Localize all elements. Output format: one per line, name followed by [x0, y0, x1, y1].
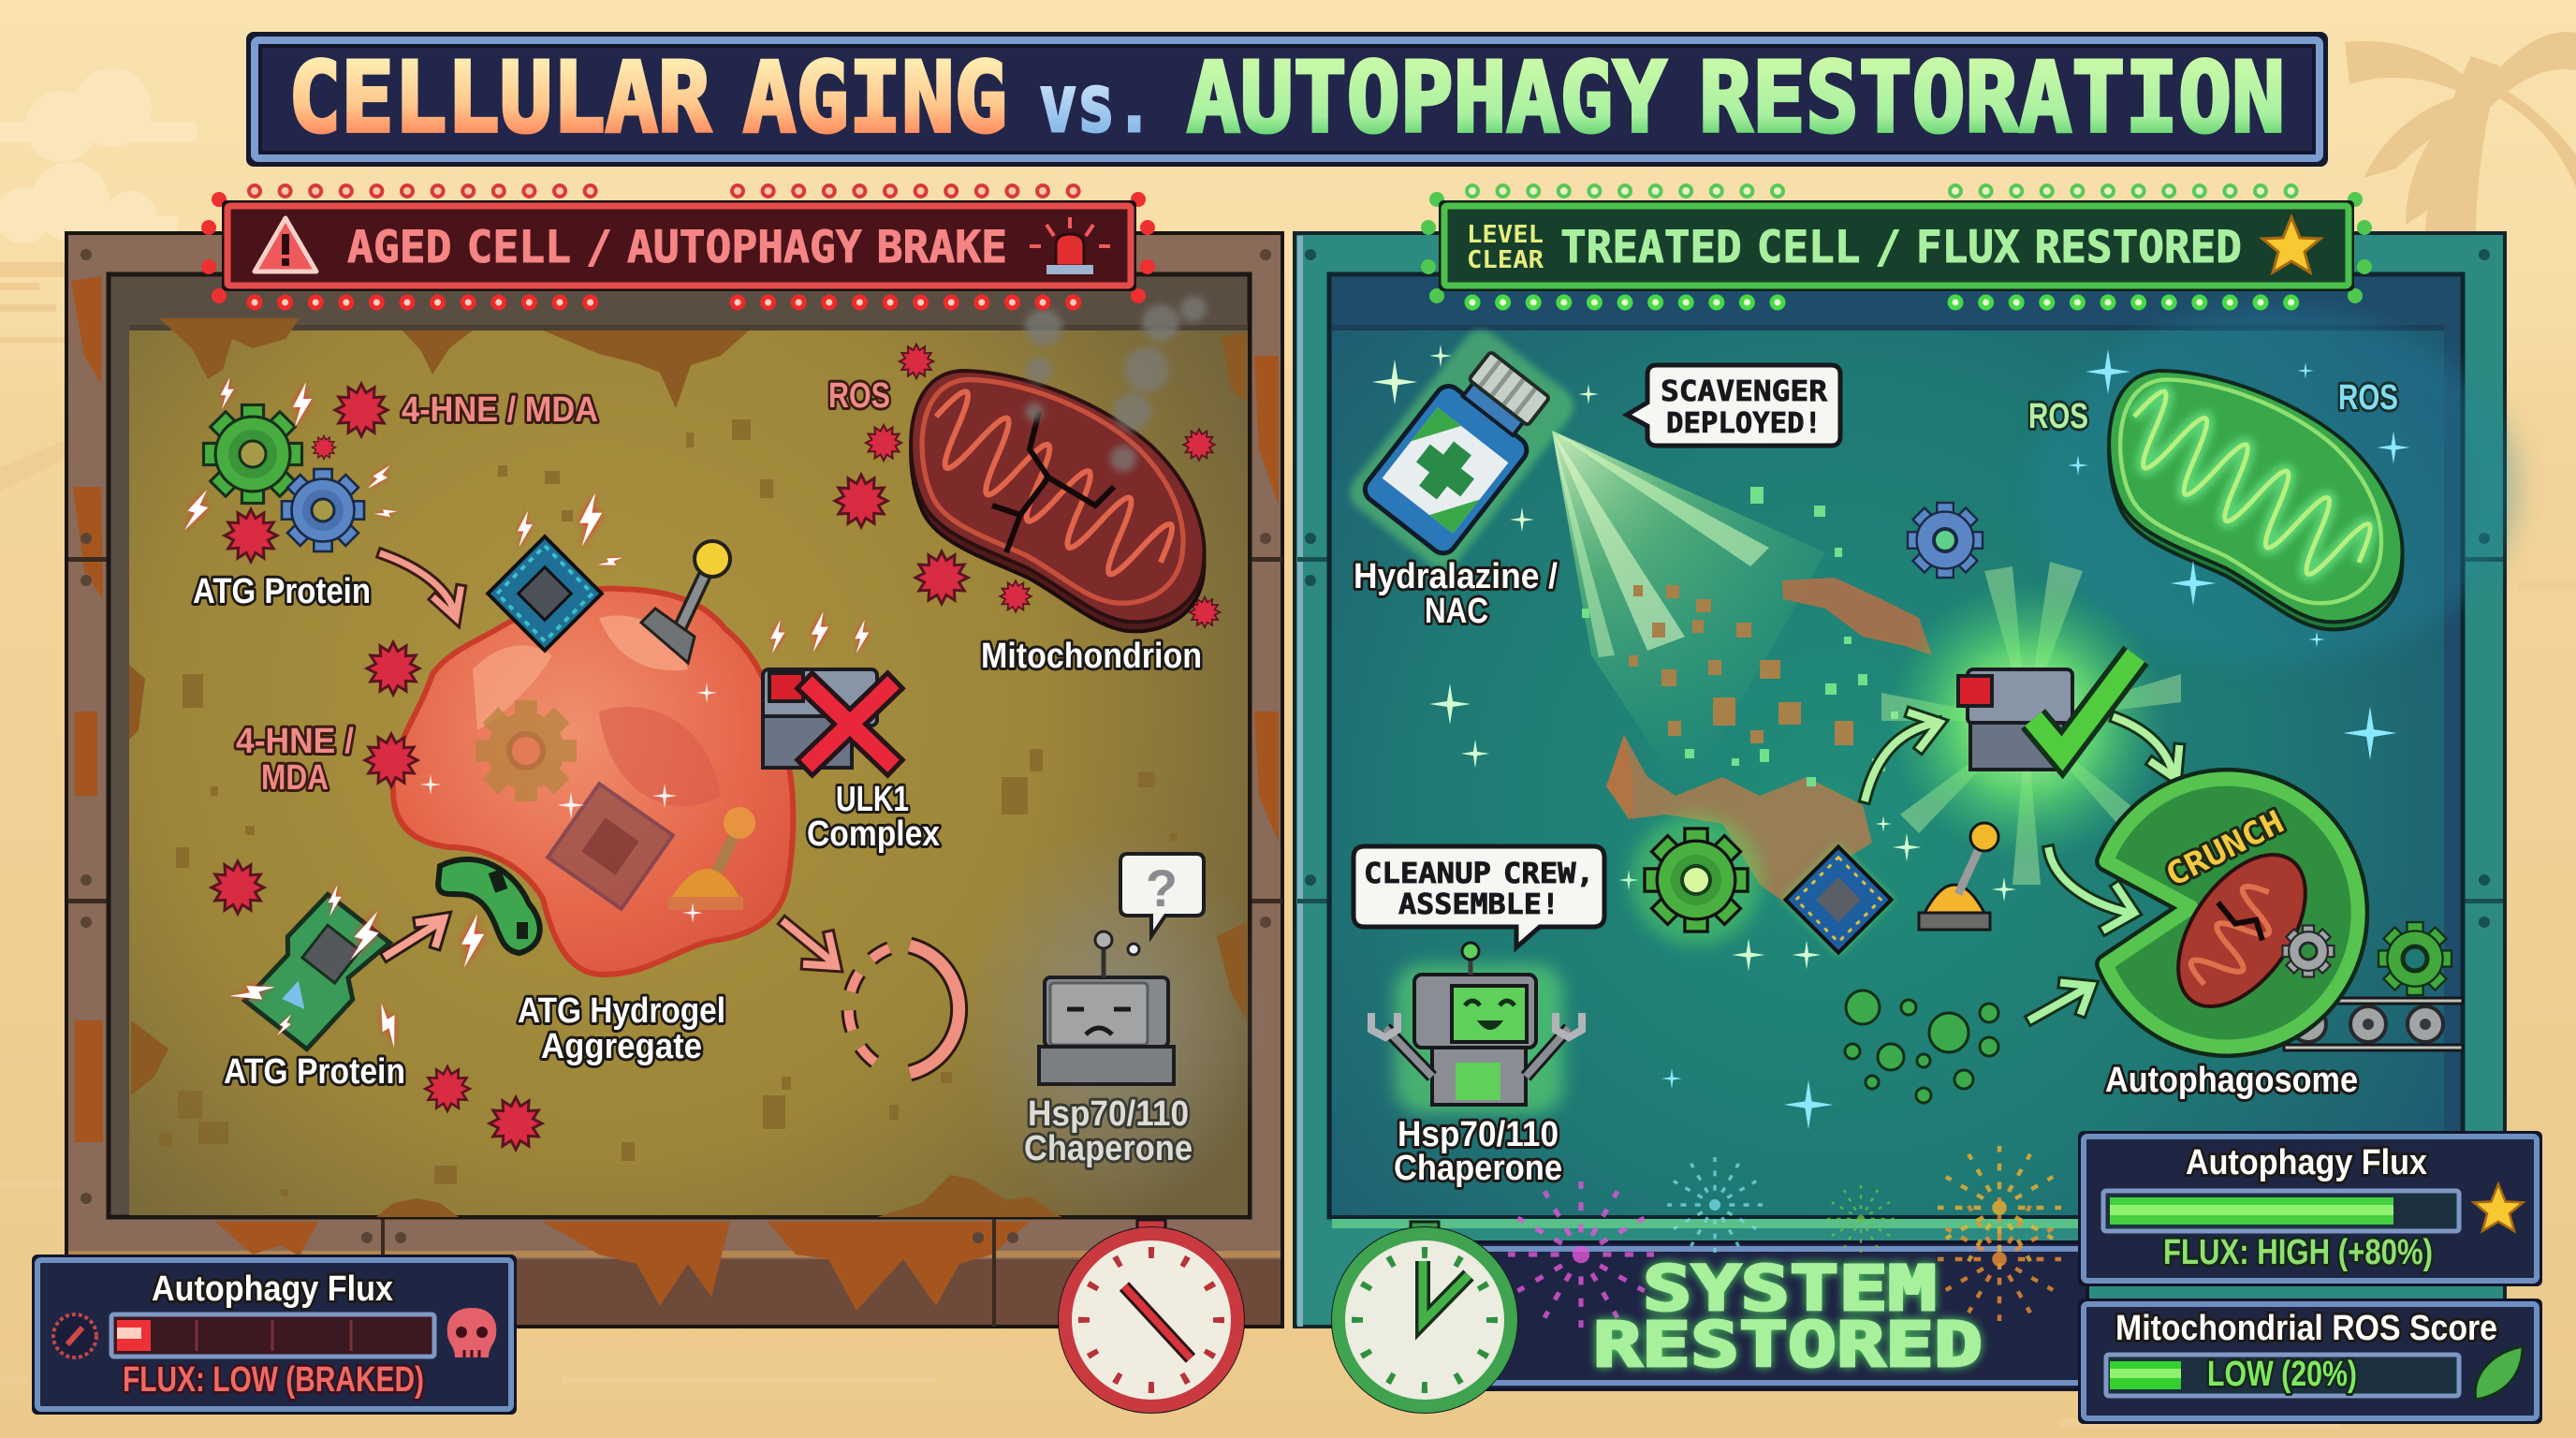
teal metal frame: [1295, 233, 2505, 1327]
arrow: fragments into autophagosome: [2032, 983, 2091, 1019]
ROS value: LOW (20%): [2207, 1355, 2357, 1394]
icon: smoke plumes: [1025, 296, 1207, 472]
icon: warning triangle: [255, 218, 316, 271]
header: treated cell banner: [1421, 191, 2372, 303]
flux bar high: [2103, 1191, 2459, 1231]
label: ROS right: ROS: [2338, 378, 2398, 418]
red stopped clock: [1060, 1220, 1243, 1412]
panel: aged cell: [66, 191, 1282, 1327]
HUD: treated autophagy flux: [2078, 1131, 2542, 1286]
label: Hsp70/110 Chaperone: [1024, 1094, 1193, 1168]
label: ATG Protein lower: ATG Protein: [224, 1052, 405, 1092]
icon: ULK1 machine restored: [1881, 562, 2181, 885]
green running clock: [1333, 1222, 1516, 1412]
HUD: aged autophagy flux: [32, 1255, 517, 1415]
hud title: Mitochondrial ROS Score: [2115, 1309, 2497, 1348]
speech bubble: scavenger deployed: DEPLOYED!: [1666, 407, 1822, 440]
level clear tag: CLEAR: [1467, 246, 1544, 274]
hud title: Autophagy Flux: [152, 1269, 393, 1309]
icon: happy chaperone robot: [1371, 943, 1582, 1114]
label: ROS left: ROS: [2028, 397, 2088, 436]
system restored text: SYSTEM: [1643, 1253, 1937, 1325]
label: ULK1 Complex: Complex: [807, 814, 940, 854]
small grey gear: [2282, 925, 2334, 977]
icon: green and blue ATG gears: [204, 404, 364, 551]
system restored text: [1593, 1253, 1983, 1381]
speech bubble: cleanup crew: [1354, 846, 1604, 947]
icon: gauge: [53, 1314, 96, 1357]
icon: failed autophagosome ring: [849, 946, 959, 1073]
label: Hydralazine / NAC: [1354, 557, 1558, 631]
marquee lights: [1472, 191, 2321, 302]
icon: green fragments: [1845, 990, 1998, 1103]
hud title: Autophagy Flux: [2186, 1143, 2427, 1182]
rusted metal frame: [66, 233, 1282, 1327]
header: aged cell banner: [201, 191, 1155, 303]
icon: gear on conveyor: [2378, 922, 2452, 995]
speech bubble: scavenger deployed: SCAVENGER: [1661, 375, 1828, 408]
icon: ROS and 4-HNE particles: [212, 345, 1220, 1150]
level clear tag: LEVEL: [1467, 221, 1544, 249]
flux bar low: [111, 1314, 434, 1357]
icon: sparks above ULK1: [770, 611, 869, 653]
green protein fragment: [438, 859, 540, 953]
speech bubble: cleanup crew: ASSEMBLE!: [1398, 888, 1559, 921]
level clear tag: [1467, 221, 1544, 274]
icon: sparks around broken chip: [228, 885, 484, 1049]
inner chamber floor: [109, 274, 1273, 1217]
flux status: FLUX: HIGH (+80%): [2163, 1233, 2433, 1272]
label: ATG Hydrogel Aggregate: ATG Hydrogel: [518, 991, 725, 1031]
system restored text: RESTORED: [1593, 1309, 1983, 1381]
flux status: FLUX: LOW (BRAKED): [123, 1360, 424, 1400]
rust residue dissolving: [1606, 578, 1932, 908]
label: Hsp70/110 Chaperone: Hsp70/110: [1028, 1094, 1189, 1134]
icon: yellow lever: [1919, 823, 1998, 930]
label: CRUNCH: CRUNCH: [2159, 803, 2291, 894]
icon: green gear glow: [1631, 814, 1762, 946]
icon: siren: [1030, 217, 1110, 274]
icon: sparks above chip: [518, 492, 623, 573]
icon: autophagosome pac-man: [2106, 779, 2358, 1047]
icon: star: [2474, 1184, 2523, 1231]
icon: gold star: [2262, 217, 2320, 272]
label: ATG Hydrogel Aggregate: Aggregate: [541, 1027, 702, 1066]
title banner: CELLULAR AGING: [288, 42, 1007, 154]
fireworks: [1508, 1146, 2061, 1328]
icon: broken ATG chip: [241, 891, 394, 1052]
marquee lights: [255, 191, 1104, 302]
icon: damaged chip: [488, 536, 602, 651]
icon: leaf: [2475, 1346, 2523, 1400]
rust stains: [129, 318, 1247, 1217]
debris particles: [1582, 487, 1898, 786]
ROS bar low: [2106, 1355, 2459, 1396]
icon: blue gear: [1908, 503, 1983, 578]
icon: Hydralazine / NAC bottle: [1342, 322, 1581, 577]
label: 4-HNE / MDA middle: 4-HNE /: [236, 722, 354, 761]
banner text: AGED CELL / AUTOPHAGY BRAKE: [347, 222, 1007, 273]
spray beam from bottle: [1552, 431, 1825, 796]
HUD: mitochondrial ROS score: [2078, 1299, 2542, 1424]
speech bubble: scavenger deployed: [1627, 365, 1840, 446]
arrow: residue to machine: [1866, 713, 1939, 798]
label: 4-HNE / MDA middle: MDA: [261, 758, 329, 798]
label: ROS: ROS: [828, 376, 890, 416]
label: 4-HNE / MDA middle: [236, 722, 354, 798]
banner text: TREATED CELL / FLUX RESTORED: [1560, 222, 2242, 273]
speech bubble: question mark: [1120, 854, 1204, 936]
arrow: machine to autophagosome: [2116, 718, 2179, 779]
inner chamber floor: [1329, 274, 2518, 1228]
icon: blue chip: [1781, 843, 1895, 957]
label: ULK1 Complex: [807, 780, 940, 854]
label: Hsp70/110 Chaperone: Chaperone: [1024, 1129, 1193, 1168]
label: Hydralazine / NAC: Hydralazine /: [1354, 557, 1558, 596]
label: Hydralazine / NAC: NAC: [1425, 592, 1488, 631]
sparkles: green stars: [1429, 683, 2016, 972]
icon: skull: [447, 1308, 496, 1357]
title banner: vs.: [1039, 58, 1153, 151]
icon: damaged mitochondrion: [911, 371, 1205, 631]
icon: lever stuck in aggregate: [641, 541, 730, 663]
label: 4-HNE / MDA: 4-HNE / MDA: [402, 390, 598, 430]
sparkles around bottle: [1372, 345, 1599, 532]
icon: healthy mitochondrion: [2109, 371, 2403, 629]
arrow: curved into autophagosome: [2049, 851, 2134, 929]
label: ULK1 Complex: ULK1: [836, 780, 909, 819]
ATG hydrogel aggregate blob: [392, 589, 793, 975]
speech bubble: question mark: ?: [1146, 858, 1178, 917]
label: ATG Protein top: ATG Protein: [193, 572, 371, 611]
label: Mitochondrion: Mitochondrion: [981, 637, 1202, 676]
title banner: AUTOPHAGY RESTORATION: [1187, 42, 2285, 154]
arrow: aggregate to ring: [785, 923, 836, 966]
system restored banner: [1432, 1146, 2087, 1389]
conveyor belt: [2284, 998, 2463, 1050]
label: Hsp70/110 Chaperone treated: Chaperone: [1394, 1149, 1562, 1188]
arrow: chip to fragment: [388, 918, 444, 955]
label: Hsp70/110 Chaperone treated: Hsp70/110: [1398, 1115, 1559, 1154]
title banner: [248, 34, 2326, 165]
icon: sad chaperone robot: [1039, 932, 1174, 1084]
icon: stress sparks around gears: [183, 377, 398, 535]
label: Hsp70/110 Chaperone treated: [1394, 1115, 1562, 1188]
engulfed mitochondrion: [2153, 832, 2331, 1029]
arrow: gears to aggregate: [383, 554, 461, 618]
speech bubble: cleanup crew: CLEANUP CREW,: [1364, 858, 1594, 890]
label: Autophagosome: Autophagosome: [2105, 1061, 2358, 1100]
label: ATG Hydrogel Aggregate: [518, 991, 725, 1066]
panel: treated cell: [1295, 191, 2518, 1327]
icon: ULK1 machine blocked: [763, 669, 887, 768]
sparkles: blue stars: [1661, 349, 2410, 1129]
